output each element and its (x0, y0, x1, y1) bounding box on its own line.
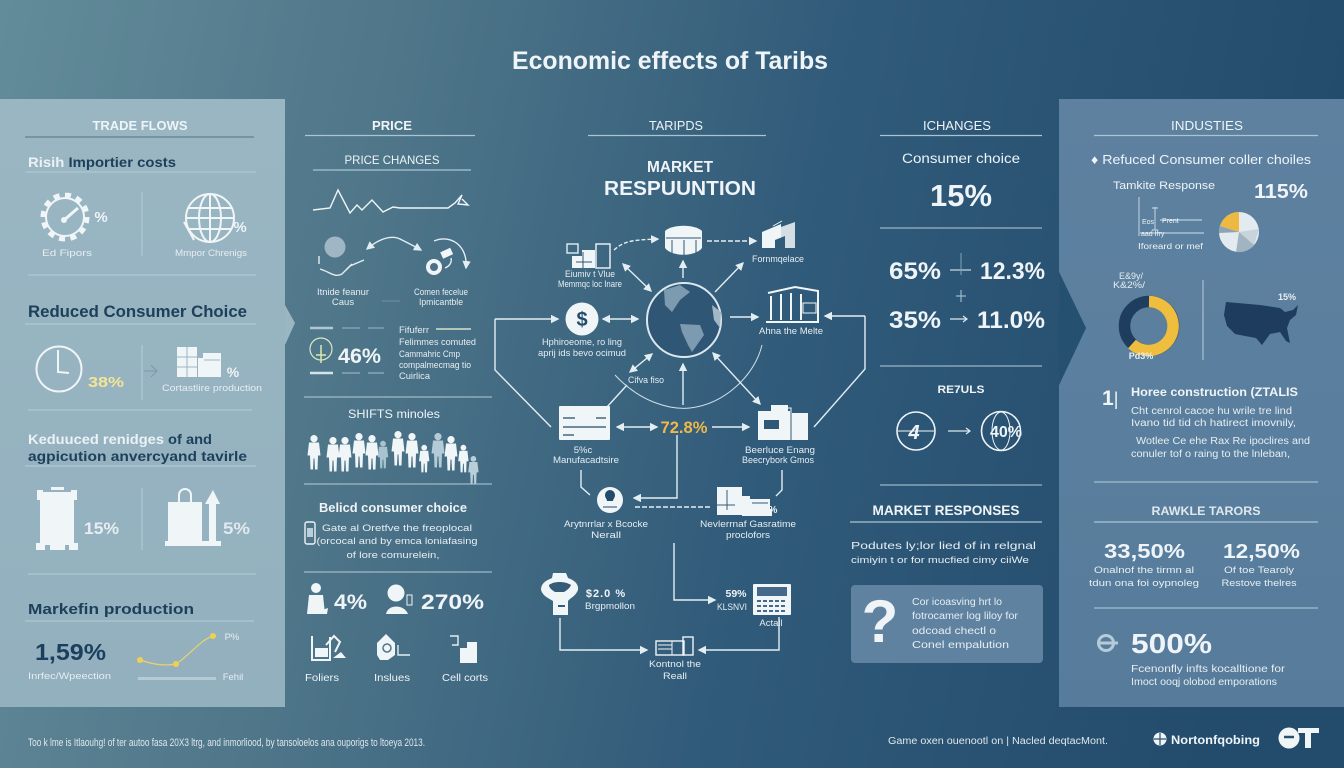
icon: right building (766, 287, 818, 322)
icon: suitcase (36, 487, 78, 550)
mini chart: Eos (1142, 219, 1155, 226)
stat row: 65 to 12.3 percent: 65% (889, 258, 941, 285)
stat: 3.20 percent: $2.0 % (586, 588, 626, 600)
text block: consumer choice: Gate al Oretfve the freoplocal (322, 523, 472, 534)
subheading: reduced consumer choices: ♦ Refuced Consumer coller choiles (1091, 152, 1312, 167)
icon: piggy (377, 634, 410, 660)
mini chart: aad Ifry (1141, 231, 1165, 238)
subheading: reduced consumer choice: Reduced Consumer Choice (28, 303, 247, 321)
heading: market responses: MARKET RESPONSES (872, 502, 1020, 518)
text block: price note: Felimmes comuted (399, 337, 476, 348)
text block: home construction: Horee construction (ZTALIS (1131, 387, 1298, 399)
panel: price (304, 118, 492, 684)
brand logo (1278, 728, 1319, 748)
donut chart (1113, 271, 1174, 361)
stat row: 65 to 12.3 percent: 12.3% (980, 258, 1045, 285)
value: 500 percent: 500% (1131, 628, 1212, 659)
stat row: 65 to 12.3 percent (889, 253, 1045, 285)
label: register: Kontnol the (649, 659, 701, 670)
mini chart: Iforeard or mef (1138, 242, 1204, 251)
line chart: price (313, 190, 468, 213)
title: Economic effects of Taribs (512, 47, 828, 75)
icon: documents (758, 405, 808, 440)
panel: tariffs flow diagram: Brgpmollon (585, 601, 635, 612)
line chart (137, 632, 243, 683)
callout: question box: ? (862, 588, 898, 655)
stat: 33,50 percent: Onalnof the tirmn al (1094, 565, 1194, 576)
text block: home construction: conuler tof o raing to the lnleban, (1131, 449, 1290, 460)
arrows: main connections (495, 239, 865, 650)
subheading: results: RE7ULS (938, 384, 984, 396)
value: percent: % (769, 505, 778, 516)
heading: price: PRICE (372, 118, 412, 133)
value: 115 percent: 115% (1254, 180, 1308, 203)
value: 5 percent: 5% (223, 520, 250, 538)
footer (28, 728, 1319, 749)
callout: question box: Cor icoasving hrt lo (912, 597, 1002, 608)
donut chart: E&9y/ (1119, 271, 1143, 281)
panel: tariffs flow diagram: Reall (663, 671, 687, 682)
stat: 12,50 percent: Restove thelres (1222, 578, 1297, 589)
icon: after globe (982, 412, 1022, 450)
callout: question box: fotrocamer log liloy for (912, 611, 1019, 622)
text block: consumer choice: (orcocal and by emca loniafasing (316, 536, 478, 547)
stat: 12,50 percent (1222, 540, 1300, 589)
icon: user (386, 584, 412, 614)
text block: consumer choice (316, 523, 478, 561)
stat: 33,50 percent: 33,50% (1104, 540, 1185, 563)
panel: industries: Imoct ooqj olobod emporations (1131, 677, 1277, 688)
panel: tariffs flow diagram: proclofors (726, 530, 770, 541)
heading: tariffs: TARIPDS (649, 119, 703, 133)
icon: before circle: 4 (907, 422, 920, 444)
text block: economy: Fcenonfly infts kocalltione for (1131, 664, 1286, 675)
donut chart: K&2%/ (1113, 280, 1146, 290)
text block: home construction (1102, 387, 1310, 460)
icon: person (307, 583, 328, 614)
panel: changes: cimiyin t or for mucfied cimy ciiWe (851, 555, 1029, 566)
icon: cost flow (319, 236, 421, 275)
panel: tariffs flow diagram: KLSNVI (717, 602, 747, 613)
value: 1,59 percent: 1,59% (35, 639, 106, 665)
panel: trade flows: agpicution anvercyand tavirle (28, 448, 247, 464)
text block: price note: Cuirlica (399, 371, 431, 382)
subheading: shifts: SHIFTS minoles (348, 407, 440, 421)
icon: factory arm (312, 636, 346, 660)
heading: changes: ICHANGES (923, 118, 991, 133)
line chart: P% (225, 632, 240, 643)
icon: US map: 15% (1278, 292, 1296, 302)
pie chart (1219, 212, 1259, 252)
callout: question box: Conel empalution (912, 640, 1009, 651)
text block: home construction: 1| (1102, 387, 1118, 410)
label: dollar: Hphiroeome, ro ling (542, 337, 622, 348)
label: documents: Beerluce Enang (745, 445, 815, 456)
text block: price note: compalmecmag tio (399, 360, 471, 371)
callout: question box: odcoad chectl o (912, 626, 997, 637)
icon: dollar: $ (576, 309, 588, 331)
value: 4 percent: 4% (334, 591, 367, 614)
stat: 46 percent (310, 328, 384, 373)
icon: factory (567, 244, 610, 268)
icon: lightbulb circle (597, 487, 623, 513)
heading: industries: INDUSTIES (1171, 118, 1243, 133)
value: percent: % (227, 364, 240, 380)
stat: 12,50 percent: 12,50% (1223, 540, 1300, 563)
icon: top right building (762, 221, 795, 248)
icon: register (656, 637, 693, 655)
donut chart: Pd3% (1129, 351, 1153, 361)
label: first figure: Ed Fipors (42, 248, 92, 259)
icon: gear gauge (43, 195, 108, 239)
stat: 12,50 percent: Of toe Tearoly (1224, 565, 1294, 576)
label: manufacturers: 5%c (574, 445, 592, 456)
icon: head bulb (541, 573, 578, 615)
label: cell costs: Cell corts (442, 673, 488, 684)
panel: price: Ipmicantble (419, 297, 463, 308)
subheading: price changes: PRICE CHANGES (344, 153, 440, 167)
icon: cycle arrows (428, 239, 466, 273)
icon: before circle (897, 412, 935, 450)
icon: after globe: 40% (990, 424, 1022, 441)
label: folders: Foliers (305, 673, 339, 684)
heading: trade flows: TRADE FLOWS (92, 118, 188, 133)
value: 15 percent: 15% (84, 520, 119, 538)
label: national: Nevlerrnaf Gasratime (700, 519, 796, 530)
stat: 46 percent: 46% (338, 345, 381, 368)
value: 15 percent: 15% (930, 178, 992, 213)
panel: trade flows (0, 99, 295, 707)
value: 72.8 percent: 72.8% (660, 419, 708, 437)
label: marketplace: Fornmqelace (752, 254, 804, 265)
label: right building: Ahna the Melte (759, 326, 823, 337)
value: 38 percent: 38% (88, 374, 124, 391)
icon row: people (308, 431, 479, 484)
label: circle node: Cifva fiso (628, 375, 664, 386)
stat: 59 percent: 59% (725, 588, 747, 600)
panel: price: Caus (332, 297, 354, 308)
footer note: Too k lme is Itlaouhg! of ter autoo fasa 20X3 ltrg, and inmorliood, by tansoloelos ana ouporigs to ltoeya 2013. (28, 737, 425, 749)
icon: boxes (717, 487, 772, 516)
panel: changes (850, 118, 1045, 663)
icon: gear gauge: % (94, 209, 108, 226)
label: production: Cortastlire production (162, 383, 262, 394)
panel: tariffs flow diagram: Beecrybork Gmos (742, 455, 814, 466)
heading: rankle tariffs: RAWKLE TARORS (1152, 504, 1260, 518)
panel: tariffs flow diagram: Memmqc loc Inare (558, 279, 622, 290)
label: retail: Actall (759, 618, 783, 629)
stat: 33,50 percent: tdun ona foi oypnoleg (1089, 578, 1199, 589)
icon: table (559, 406, 610, 440)
value: 270 percent: 270% (421, 591, 484, 614)
label: inslues: Inslues (374, 673, 410, 684)
icon: dollar (566, 302, 598, 336)
icon: small gauge (1097, 636, 1118, 650)
panel: tariffs flow diagram: Nerall (591, 530, 621, 541)
icon: coins (450, 636, 477, 663)
line chart: Fehil (223, 672, 243, 683)
panel: tariffs flow diagram: aprij ids bevo ocimud (538, 348, 626, 359)
label: lightbulb: Arytnrrlar x Bcocke (564, 519, 648, 530)
text block: consumer choice: of lore comurelein, (346, 550, 440, 561)
icon: logo mark (1154, 732, 1166, 746)
subheading: consumer choice: Consumer choice (902, 151, 1020, 166)
mini chart (1138, 197, 1204, 251)
panel: industries (1059, 99, 1344, 707)
text block: home construction: Ivano tid tid ch hatirect imovnily, (1131, 418, 1296, 429)
icon: globe (647, 283, 721, 357)
heading: market response: MARKET (647, 159, 713, 176)
label: factory: Eiumiv t Vlue (565, 269, 615, 280)
text block: home construction: Wotlee Ce ehe Rax Re ipoclires and (1136, 436, 1310, 447)
text block: price note: Cammahric Cmp (399, 349, 460, 360)
mini chart: Prent (1162, 218, 1179, 225)
brand name: Nortonfqobing (1171, 735, 1260, 747)
panel: tariffs flow diagram (495, 119, 865, 682)
text block: market responses: Podutes ly;lor lied of in relgnal (851, 540, 1036, 552)
stat: 33,50 percent (1089, 540, 1199, 589)
label: tamkite response: Tamkite Response (1113, 180, 1215, 192)
stat row: 35 to 11.0 percent: 35% (889, 307, 941, 334)
subheading: market production: Markefin production (28, 601, 194, 618)
label: left cost: Itnide feanur (317, 287, 369, 298)
subheading: reduced consumer choice: Belicd consumer choice (319, 501, 467, 515)
text block: price note (399, 325, 476, 382)
icon: phone (305, 522, 315, 544)
stat row: 35 to 11.0 percent: 11.0% (977, 307, 1045, 334)
icon: globe (184, 194, 247, 242)
panel: tariffs flow diagram: RESPUUNTION (604, 177, 756, 200)
panel: tariffs flow diagram: Manufacadtsire (553, 455, 619, 466)
stat row: 35 to 11.0 percent (889, 307, 1045, 334)
icon: cylinder store (665, 226, 702, 255)
text block: home construction: Cht cenrol cacoe hu wrile tre lind (1131, 406, 1292, 417)
icon: production boxes (177, 347, 221, 377)
icon: US map (1224, 292, 1298, 345)
footer center text: Game oxen ouenootl on | Nacled deqtacMont. (888, 736, 1108, 747)
icon: calculator (753, 584, 791, 615)
label: production value: Inrfec/Wpeection (28, 671, 111, 682)
subheading: reduced ranges: Keduuced renidges of and (28, 431, 212, 447)
subheading: rising importer costs: Risih Importier costs (28, 154, 176, 170)
icon: globe: % (233, 219, 247, 236)
label: second figure: Mmpor Chrenigs (175, 248, 247, 259)
text block: price note: Fifuferr (399, 325, 429, 336)
label: right cost: Comen fecelue (414, 287, 468, 298)
callout: question box (851, 585, 1043, 663)
icon: bag with rising arrow (165, 489, 221, 546)
icon: clock (36, 346, 82, 392)
